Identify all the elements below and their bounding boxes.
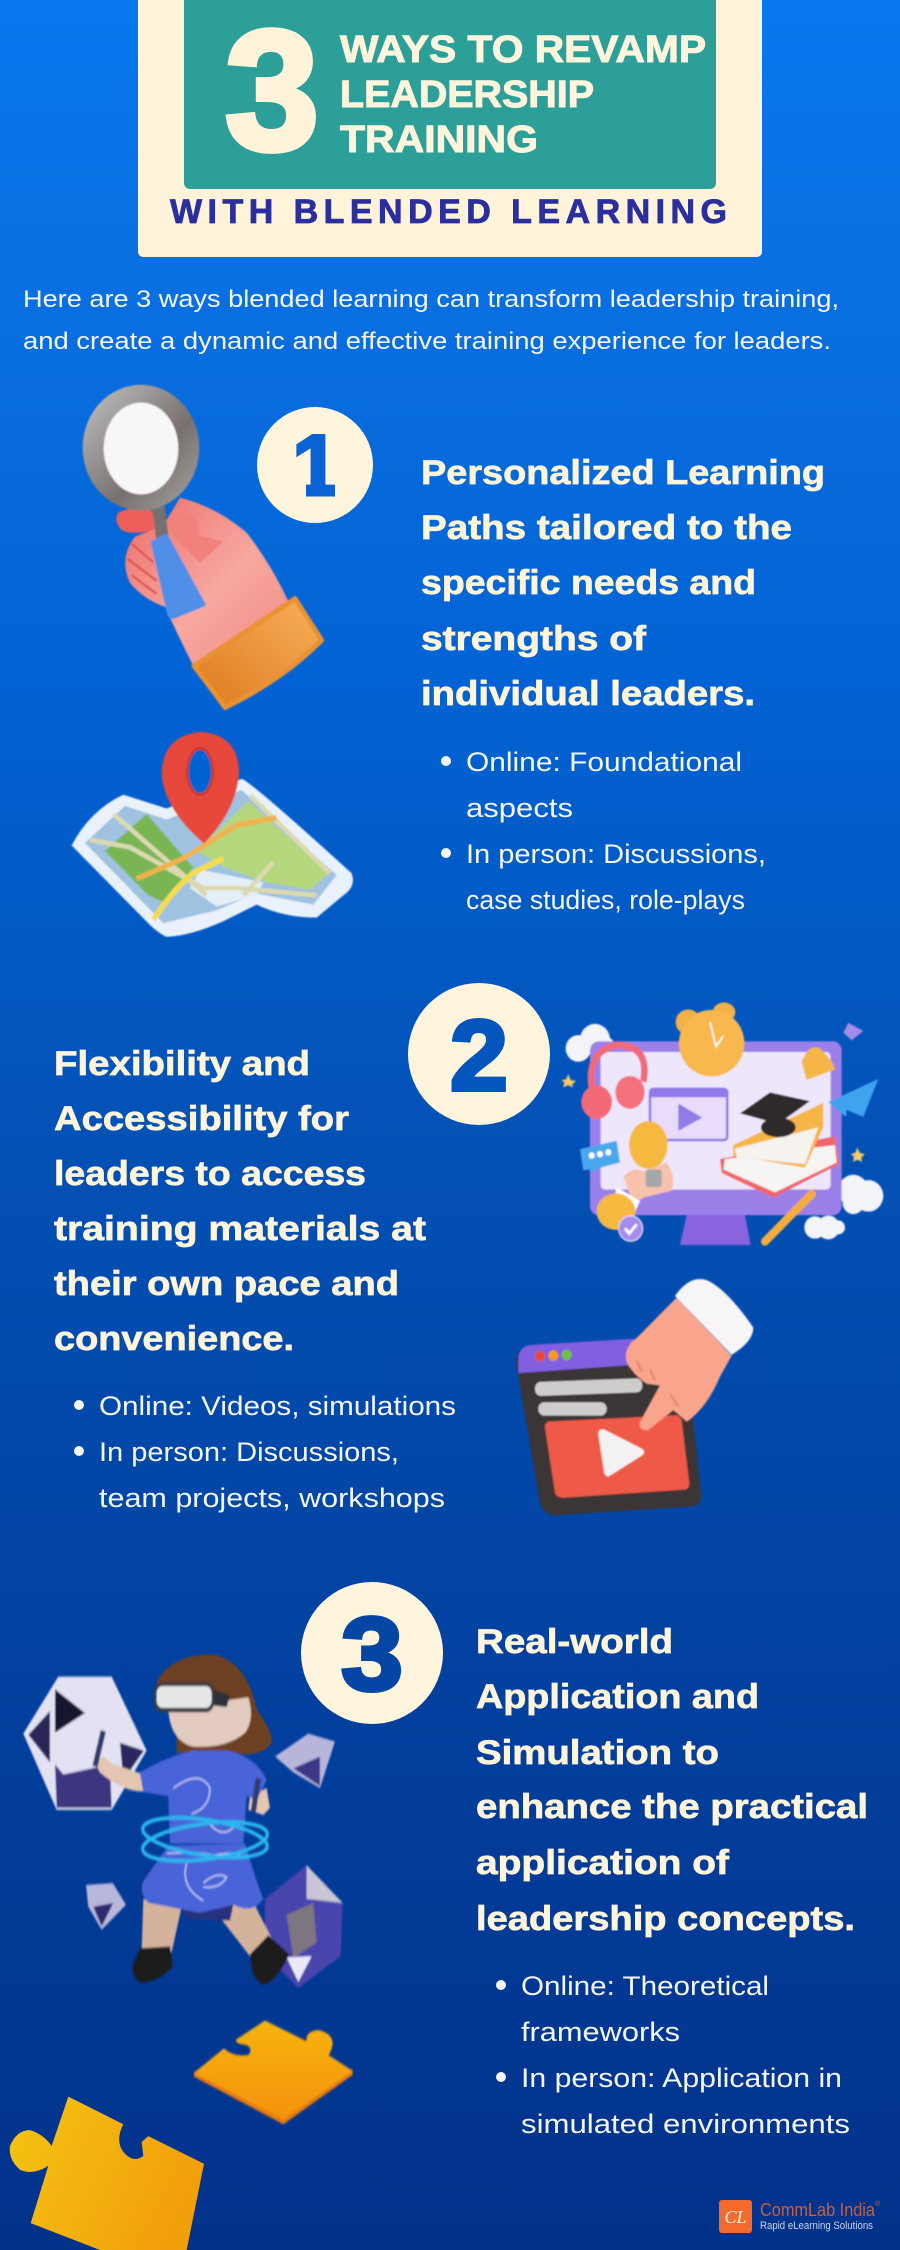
- brand name: CommLab India: [760, 2200, 876, 2220]
- step 2 bullets: Online: Videos, simulations: [99, 1391, 456, 1421]
- shoes: [132, 1946, 173, 1983]
- icon: hand pressing video play: [516, 1279, 753, 1515]
- controllers: [95, 1731, 258, 1812]
- step 2 heading: convenience.: [54, 1320, 294, 1358]
- step 2 heading: Accessibility for: [54, 1100, 349, 1138]
- icon: map with location pin: [72, 732, 353, 937]
- step 2 heading: leaders to access: [54, 1155, 366, 1193]
- icon: hand holding magnifier: [83, 385, 322, 707]
- clouds: [566, 1024, 883, 1239]
- title line 3: TRAINING: [340, 119, 538, 161]
- title line 1: WAYS TO REVAMP: [340, 29, 706, 71]
- check badge: [619, 1216, 643, 1241]
- step 3 heading: Simulation to: [476, 1734, 719, 1772]
- teal title panel: [184, 0, 716, 189]
- step 1 bullets: aspects: [466, 793, 573, 823]
- step 1 heading: Personalized Learning: [421, 454, 825, 492]
- step 1 number badge: 1: [292, 418, 340, 514]
- paper plane: [828, 1079, 878, 1117]
- step 2 bullets: In person: Discussions,: [99, 1437, 399, 1467]
- step 1 number badge: [257, 407, 373, 523]
- small purple plane: [843, 1023, 863, 1040]
- icon: computer with learning items: [561, 1002, 883, 1245]
- step 1 bullets: [441, 747, 766, 915]
- step 3 bullets: Online: Theoretical: [521, 1971, 769, 2001]
- step 3 bullets: frameworks: [521, 2017, 680, 2047]
- subtitle: WITH BLENDED LEARNING: [170, 193, 727, 231]
- intro text: and create a dynamic and effective training experience for leaders.: [23, 328, 831, 355]
- step 2 bullets: [74, 1391, 456, 1513]
- icon: girl in VR headset with gems: [23, 1654, 343, 1988]
- step 3 number badge: 3: [341, 1597, 403, 1713]
- step 1 bullets: In person: Discussions,: [466, 839, 766, 869]
- upper small gem: [275, 1734, 335, 1788]
- rings: [141, 1811, 269, 1867]
- legs: [142, 1899, 182, 1952]
- step 3 heading: [476, 1623, 868, 1938]
- stars: [561, 1074, 865, 1162]
- card background: [138, 0, 762, 257]
- step 2 heading: training materials at: [54, 1210, 426, 1248]
- step 3 heading: application of: [476, 1844, 730, 1882]
- hand with bulb: [597, 1121, 673, 1230]
- clock: [676, 1002, 744, 1077]
- logo mark: [719, 2200, 752, 2233]
- step 1 heading: specific needs and: [421, 564, 756, 602]
- intro text: [23, 286, 839, 355]
- logo: CommLab India: [719, 2200, 881, 2233]
- dress: [140, 1751, 267, 1921]
- left gem: [23, 1677, 147, 1810]
- books and cap: [720, 1092, 839, 1198]
- step 1 heading: Paths tailored to the: [421, 509, 792, 547]
- registered mark: ®: [875, 2200, 881, 2208]
- big number 3: 3: [225, 0, 319, 186]
- step 1 bullets: case studies, role-plays: [466, 885, 745, 915]
- intro text: Here are 3 ways blended learning can transform leadership training,: [23, 286, 839, 313]
- step 2 heading: Flexibility and: [54, 1045, 310, 1083]
- logo initials: CL: [724, 2207, 747, 2227]
- step 1 heading: individual leaders.: [421, 675, 755, 713]
- step 2 bullets: team projects, workshops: [99, 1483, 445, 1513]
- step 2 number badge: 2: [450, 1000, 508, 1112]
- icon: yellow puzzle piece: [10, 2097, 204, 2250]
- step 2 number badge: [408, 983, 550, 1125]
- step 3 bullets: simulated environments: [521, 2109, 850, 2139]
- title line 2: LEADERSHIP: [340, 74, 594, 116]
- headphones: [581, 1045, 645, 1119]
- face: [168, 1697, 251, 1747]
- lower small gem: [86, 1883, 126, 1930]
- step 3 heading: Real-world: [476, 1623, 673, 1661]
- bell: [802, 1047, 835, 1080]
- visor: [154, 1682, 230, 1712]
- hair: [157, 1654, 272, 1754]
- right gem: [265, 1865, 343, 1988]
- arms: [95, 1757, 143, 1791]
- step 1 bullets: Online: Foundational: [466, 747, 742, 777]
- step 2 heading: their own pace and: [54, 1265, 399, 1303]
- step 3 heading: leadership concepts.: [476, 1900, 855, 1938]
- step 3 bullets: [496, 1971, 850, 2139]
- step 3 heading: enhance the practical: [476, 1788, 868, 1826]
- title card: [138, 0, 762, 257]
- step 3 heading: Application and: [476, 1678, 759, 1716]
- pencil: [765, 1194, 812, 1241]
- step 3 number badge: [301, 1582, 443, 1724]
- step 3 bullets: In person: Application in: [521, 2063, 842, 2093]
- step 2 heading: [54, 1045, 426, 1358]
- tagline: Rapid eLearning Solutions: [760, 2220, 873, 2232]
- speech bubble: [580, 1141, 620, 1172]
- step 1 heading: [421, 454, 825, 713]
- video window: [650, 1089, 727, 1140]
- step 1 heading: strengths of: [421, 620, 647, 658]
- icon: orange puzzle piece: [194, 2021, 353, 2124]
